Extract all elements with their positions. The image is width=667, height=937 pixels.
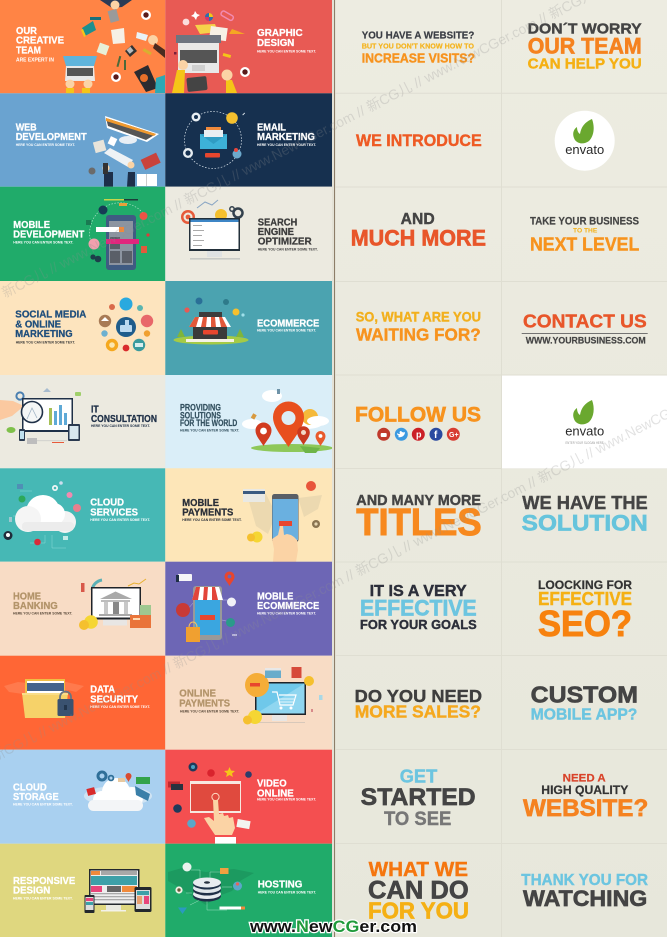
- text: it is a very effective: EFFECTIVE: [360, 596, 477, 621]
- text: so what are you waiting for: SO, WHAT ARE YOU: [356, 308, 481, 324]
- heading: data security: SECURITY: [90, 693, 138, 705]
- panel: mobile payments: [165, 468, 332, 562]
- heading: web development: DEVELOPMENT: [16, 131, 87, 143]
- heading: home banking: HERE YOU CAN ENTER SOME TEXT.: [13, 612, 72, 616]
- logo: envato badge on circle: envato: [565, 142, 604, 157]
- heading: it consultation: [91, 403, 157, 428]
- text: take your business to the next level: TAKE YOUR BUSINESS: [530, 215, 639, 227]
- heading: search engine optimizer: ENGINE: [258, 226, 294, 238]
- text: don't worry our team can help you: CAN HELP YOU: [528, 56, 642, 73]
- heading: providing solutions for the world: [180, 403, 239, 433]
- heading: social media and online marketing: HERE YOU CAN ENTER SOME TEXT.: [16, 341, 75, 345]
- panel: our creative team: [0, 0, 165, 93]
- heading: cloud storage: HERE YOU CAN ENTER SOME TEXT.: [13, 803, 73, 807]
- heading: cloud services: CLOUD: [90, 497, 124, 509]
- heading: online payments: HERE YOU CAN ENTER SOME TEXT.: [180, 709, 239, 713]
- heading: data security: [90, 684, 150, 709]
- heading: video online: VIDEO: [257, 778, 287, 790]
- text: and much more: MUCH MORE: [351, 225, 486, 250]
- heading: providing solutions for the world: HERE YOU CAN ENTER SOME TEXT.: [180, 429, 239, 433]
- heading: online payments: PAYMENTS: [179, 697, 230, 709]
- text: and many more titles: TITLES: [356, 502, 482, 544]
- illustration: phone with tapping hand: [243, 481, 322, 562]
- icons: social media buttons: p: [416, 430, 422, 440]
- text: need a high quality website: WEBSITE?: [523, 795, 648, 822]
- panel: white envato logo: ENTER YOUR SLOGAN HERE: [566, 441, 604, 445]
- text: loocking for effective seo: [538, 578, 632, 644]
- text: thank you for watching: [521, 872, 648, 911]
- heading: providing solutions for the world: SOLUTIONS: [180, 410, 221, 420]
- heading: email marketing: [257, 121, 316, 147]
- text: do you need more sales: DO YOU NEED: [355, 686, 482, 706]
- heading: video online: [257, 778, 316, 802]
- panel: mobile development: [0, 187, 165, 281]
- text: and much more: AND: [401, 211, 435, 228]
- heading: video online: ONLINE: [257, 787, 294, 799]
- panel: mobile ecommerce: [165, 562, 332, 656]
- text: contact us with website: WWW.YOURBUSINESS.COM: [526, 335, 646, 346]
- text: need a high quality website: [523, 773, 648, 822]
- heading: responsive design: HERE YOU CAN ENTER SOME TEXT.: [13, 896, 73, 900]
- heading: search engine optimizer: HERE YOU CAN ENTER SOME TEXT.: [258, 248, 318, 252]
- text: get started to see: STARTED: [361, 784, 476, 811]
- panel: it consultation: [0, 375, 165, 468]
- heading: video online: HERE YOU CAN ENTER SOME TEXT.: [257, 798, 316, 802]
- heading: hosting: HOSTING: [258, 879, 302, 891]
- illustration: monitor with magnifier and devices: [0, 388, 81, 444]
- heading: graphic design: HERE YOU CAN ENTER SOME TEXT.: [257, 49, 316, 53]
- heading: graphic design: [257, 27, 316, 53]
- text: it is a very effective: FOR YOUR GOALS: [360, 617, 477, 632]
- panel: white envato logo: [502, 376, 667, 468]
- illustration: envelope with orbit icons: [183, 112, 245, 168]
- heading: cloud services: [90, 497, 150, 522]
- heading: social media and online marketing: [15, 309, 87, 345]
- heading: mobile development: HERE YOU CAN ENTER SOME TEXT.: [13, 241, 73, 245]
- panel: cloud storage: [0, 750, 165, 844]
- heading: email marketing: HERE YOU CAN ENTER YOUR TEXT.: [257, 143, 316, 147]
- text: we have the solution: WE HAVE THE: [522, 492, 648, 513]
- panel: responsive design: [0, 844, 165, 937]
- text: loocking for effective seo: EFFECTIVE: [538, 588, 632, 609]
- text: contact us with website: [522, 310, 648, 346]
- heading: mobile payments: PAYMENTS: [182, 506, 233, 518]
- heading: email marketing: MARKETING: [257, 131, 315, 143]
- heading: our creative team: ARE EXPERT IN: [16, 58, 54, 64]
- heading: mobile development: MOBILE: [13, 219, 50, 231]
- text: we introduce: WE INTRODUCE: [356, 132, 482, 150]
- heading: cloud storage: [13, 781, 73, 807]
- heading: responsive design: RESPONSIVE: [13, 875, 75, 887]
- illustration: cloud with gears and tags: [84, 772, 152, 811]
- heading: hosting: [258, 879, 316, 894]
- text: and many more titles: AND MANY MORE: [356, 493, 481, 509]
- text: you have a website: [362, 30, 475, 65]
- heading: mobile payments: [182, 497, 242, 522]
- heading: it consultation: HERE YOU CAN ENTER SOME TEXT.: [91, 424, 150, 428]
- heading: social media and online marketing: & ONLINE: [15, 318, 61, 330]
- panel: video online: [165, 750, 332, 844]
- illustration: monitor and keyboard from above: [88, 116, 161, 187]
- panel: cloud services: [0, 468, 165, 562]
- text: custom mobile app: MOBILE APP?: [531, 706, 637, 723]
- text: don't worry our team can help you: [528, 20, 642, 73]
- text: contact us with website: CONTACT US: [523, 310, 647, 331]
- panel: social media and online marketing: [0, 281, 165, 375]
- heading: our creative team: TEAM: [16, 44, 41, 56]
- heading: cloud storage: STORAGE: [13, 791, 59, 803]
- icons: social media buttons: G+: [449, 432, 459, 439]
- text: what we can do for you: [368, 859, 469, 923]
- heading: cloud services: HERE YOU CAN ENTER SOME TEXT.: [90, 518, 150, 522]
- text: we have the solution: [522, 492, 648, 536]
- panel: title cells background: [335, 0, 667, 937]
- watermark: bottom site banner: www.NewCGer.com: [249, 917, 417, 936]
- text: and much more: [351, 211, 486, 250]
- text: take your business to the next level: TO THE: [573, 229, 597, 235]
- heading: responsive design: DESIGN: [13, 885, 50, 897]
- heading: social media and online marketing: SOCIAL MEDIA: [15, 309, 87, 321]
- text: we have the solution: SOLUTION: [522, 511, 648, 536]
- panel: email marketing: [165, 93, 332, 187]
- text: get started to see: TO SEE: [384, 809, 451, 830]
- text: so what are you waiting for: [356, 308, 481, 345]
- heading: mobile ecommerce: [257, 590, 319, 616]
- text: what we can do for you: FOR YOU: [368, 897, 469, 923]
- heading: search engine optimizer: SEARCH: [258, 216, 297, 228]
- panel: search engine optimizer: [165, 187, 332, 281]
- text: thank you for watching: THANK YOU FOR: [521, 872, 648, 889]
- heading: mobile development: DEVELOPMENT: [13, 229, 85, 241]
- heading: web development: HERE YOU CAN ENTER SOME TEXT.: [16, 143, 75, 147]
- heading: mobile ecommerce: HERE YOU CAN ENTER SOME TEXT.: [257, 612, 316, 616]
- illustration: storefront with awning: [174, 298, 248, 344]
- text: it is a very effective: [360, 583, 477, 632]
- illustration: designer desk with laptop: [172, 10, 250, 93]
- text: need a high quality website: HIGH QUALITY: [541, 783, 628, 797]
- heading: ecommerce: HERE YOU CAN ENTER SOME TEXT.: [257, 328, 316, 332]
- heading: hosting: HERE YOU CAN ENTER SOME TEXT.: [258, 890, 316, 894]
- text: don't worry our team can help you: DON´T WORRY: [528, 20, 642, 37]
- heading: our creative team: CREATIVE: [16, 35, 64, 47]
- text: what we can do for you: CAN DO: [368, 876, 469, 904]
- icons: social media buttons: [377, 428, 460, 441]
- heading: social media and online marketing: MARKETING: [15, 328, 73, 340]
- heading: mobile ecommerce: ECOMMERCE: [257, 600, 319, 612]
- illustration: server stack with connected icons: [168, 862, 254, 914]
- panel: providing solutions for the world: [165, 375, 333, 468]
- panel: data security: [0, 656, 165, 750]
- heading: home banking: BANKING: [13, 600, 58, 612]
- illustration: folder with padlock: [4, 679, 84, 718]
- text: you have a website: INCREASE VISITS?: [362, 50, 475, 65]
- logo: envato badge on circle: [555, 111, 615, 171]
- text: need a high quality website: NEED A: [563, 773, 606, 785]
- panel: home banking: [0, 562, 165, 656]
- heading: mobile payments: MOBILE: [182, 497, 219, 509]
- text: don't worry our team can help you: OUR TEAM: [528, 33, 642, 58]
- panel: ecommerce: [165, 281, 332, 375]
- heading: cloud storage: CLOUD: [13, 781, 47, 793]
- panel: white envato logo: envato: [565, 423, 604, 438]
- illustration: social icon cluster around thumbs up: [99, 298, 153, 351]
- panel: graphic design: [165, 0, 332, 93]
- text: do you need more sales: [355, 686, 482, 722]
- illustration: desk with laptop and hands: [63, 0, 165, 93]
- heading: mobile development: [13, 219, 85, 245]
- heading: search engine optimizer: [258, 216, 318, 252]
- heading: search engine optimizer: OPTIMIZER: [258, 236, 312, 248]
- heading: online payments: [179, 688, 239, 713]
- heading: web development: [16, 121, 87, 147]
- heading: providing solutions for the world: PROVIDING: [180, 403, 221, 413]
- heading: mobile payments: HERE YOU CAN ENTER SOME TEXT.: [182, 518, 242, 522]
- heading: home banking: [13, 591, 72, 616]
- heading: our creative team: OUR: [16, 25, 37, 37]
- text: get started to see: [361, 766, 476, 830]
- heading: it consultation: CONSULTATION: [91, 413, 157, 425]
- icons: social media buttons: f: [434, 430, 438, 441]
- illustration: cloud with connected icons: [4, 481, 81, 548]
- panel: hosting: [165, 844, 332, 937]
- text: get started to see: GET: [400, 766, 438, 787]
- text: what we can do for you: WHAT WE: [369, 859, 468, 881]
- illustration: monitor with target and gears: [181, 200, 242, 260]
- text: take your business to the next level: NEXT LEVEL: [530, 234, 639, 255]
- heading: responsive design: [13, 875, 75, 900]
- text: follow us: FOLLOW US: [355, 404, 481, 427]
- panel: web development: [0, 93, 165, 187]
- heading: data security: DATA: [90, 684, 115, 696]
- heading: email marketing: EMAIL: [257, 121, 287, 133]
- column separator: [332, 0, 335, 937]
- illustration: phone store with tags: [176, 572, 237, 642]
- text: thank you for watching: WATCHING: [523, 886, 647, 911]
- heading: web development: WEB: [16, 121, 37, 133]
- illustration: monitor with bank building: [79, 579, 151, 630]
- heading: online payments: ONLINE: [179, 688, 216, 700]
- heading: providing solutions for the world: FOR THE WORLD: [180, 418, 237, 428]
- heading: mobile ecommerce: MOBILE: [257, 590, 293, 602]
- illustration: responsive devices: [84, 869, 152, 913]
- text: do you need more sales: MORE SALES?: [355, 702, 481, 722]
- text: custom mobile app: [531, 682, 638, 723]
- heading: cloud services: SERVICES: [90, 506, 138, 518]
- panel: online payments: [165, 656, 332, 750]
- heading: our creative team: [16, 25, 64, 64]
- illustration: video window with pointing hand: [168, 762, 252, 844]
- illustration: smartphone with app icons: [86, 199, 150, 270]
- text: loocking for effective seo: LOOCKING FOR: [538, 578, 632, 592]
- heading: ecommerce: ECOMMERCE: [257, 318, 319, 330]
- illustration: monitor with shopping cart: [243, 667, 322, 724]
- heading: home banking: HOME: [13, 591, 41, 603]
- heading: graphic design: GRAPHIC: [257, 27, 303, 39]
- text: you have a website: BUT YOU DON'T KNOW HOW TO: [362, 42, 474, 51]
- text: it is a very effective: IT IS A VERY: [370, 583, 467, 600]
- text: you have a website: YOU HAVE A WEBSITE?: [362, 30, 474, 42]
- text: loocking for effective seo: SEO?: [538, 603, 632, 644]
- heading: graphic design: DESIGN: [257, 37, 294, 49]
- text: take your business to the next level: [530, 215, 639, 255]
- text: so what are you waiting for: WAITING FOR?: [356, 325, 481, 345]
- heading: data security: HERE YOU CAN ENTER SOME TEXT.: [90, 705, 150, 709]
- illustration: map pins on green land: [242, 389, 333, 453]
- heading: it consultation: IT: [91, 403, 99, 415]
- text: custom mobile app: CUSTOM: [531, 682, 638, 708]
